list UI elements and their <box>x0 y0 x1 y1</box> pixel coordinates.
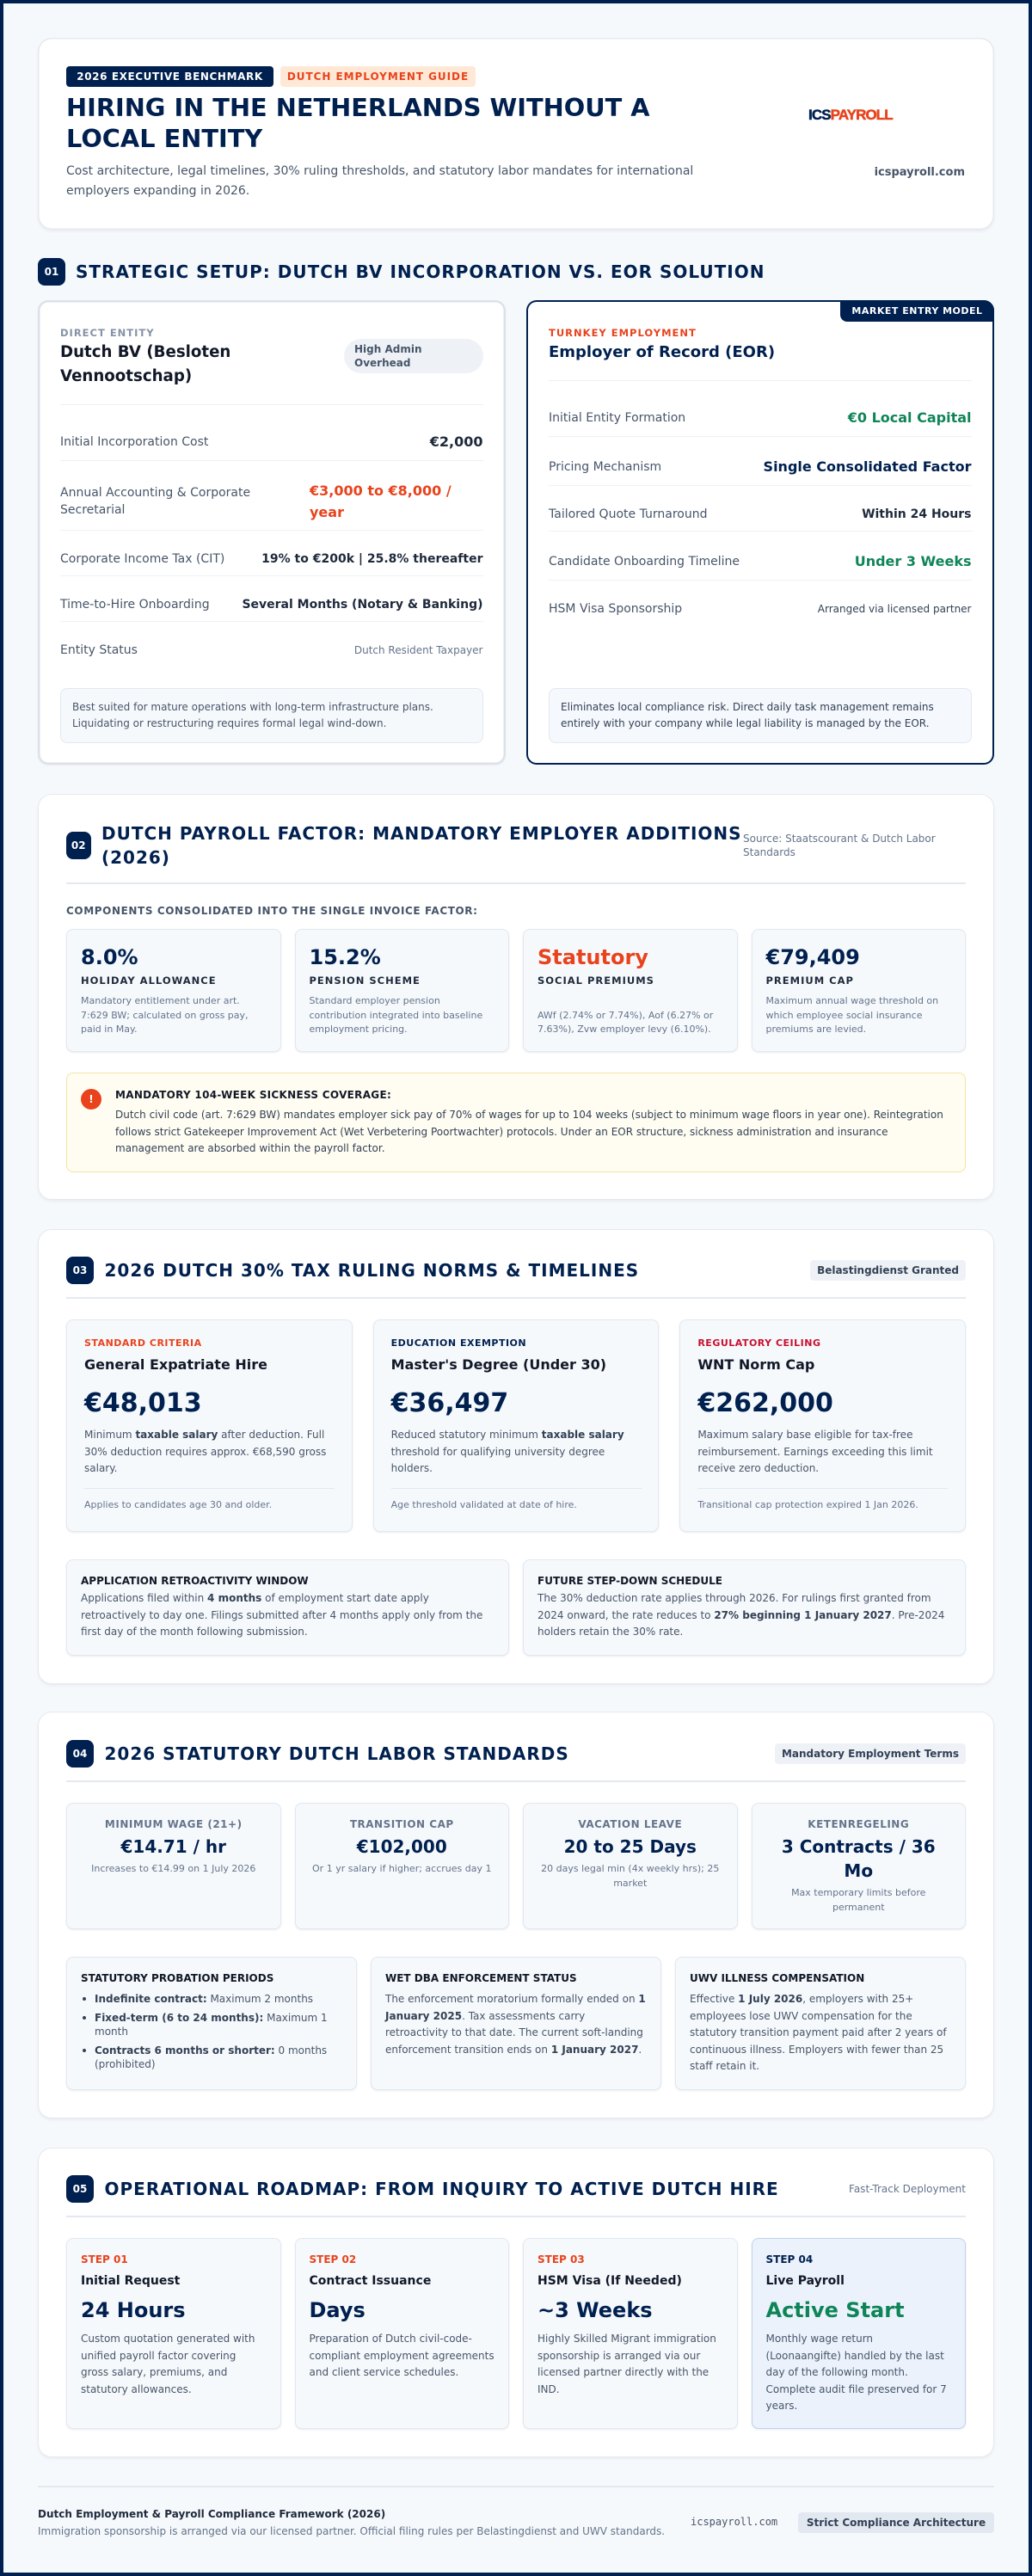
list: probation: month <box>95 2026 128 2038</box>
tag: Mandatory Employment Terms <box>782 1748 959 1760</box>
stat: minimum wage: MINIMUM WAGE (21+) <box>105 1818 243 1830</box>
card: WNT norm cap: Transitional cap protection expired 1 Jan 2026. <box>697 1499 918 1510</box>
row: CIT: Corporate Income Tax (CIT) <box>60 552 224 566</box>
row: CIT <box>60 543 483 576</box>
row: pricing: Pricing Mechanism <box>549 459 661 473</box>
card: general expatriate: General Expatriate Hire <box>84 1356 267 1373</box>
step 4 <box>752 2238 966 2429</box>
card: UWV illness: Effective 1 July 2026, employers with 25+ <box>690 1993 913 2005</box>
stat: minimum wage: Increases to €14.99 on 1 July 2026 <box>91 1863 255 1873</box>
number badge 01 <box>38 258 65 286</box>
callout body: management are absorbed within the payroll factor. <box>115 1142 385 1154</box>
panel: section 3 tax ruling <box>38 1229 994 1684</box>
card: general expatriate <box>66 1319 353 1532</box>
card: UWV illness: statutory transition payment paid after 2 years of <box>690 2026 947 2038</box>
badge: 2026 executive benchmark <box>66 66 273 87</box>
icon: warning <box>81 1089 101 1110</box>
step 4: STEP 04 <box>765 2253 813 2266</box>
number badge 02 <box>66 832 91 859</box>
section title: (2026) <box>101 847 170 868</box>
card: premium cap: PREMIUM CAP <box>765 974 854 987</box>
card: pension scheme: Standard employer pension <box>310 995 440 1006</box>
side note: Fast-Track Deployment <box>849 2183 966 2195</box>
step 1: gross salary, premiums, and <box>81 2366 227 2378</box>
row: accounting: Annual Accounting & Corporate <box>60 485 250 499</box>
card: holiday allowance: paid in May. <box>81 1024 137 1035</box>
card: general expatriate: 30% deduction requires approx. €68,590 gross <box>84 1445 326 1457</box>
card: step-down schedule <box>523 1559 966 1656</box>
step 2: Preparation of Dutch civil-code- <box>310 2333 472 2345</box>
number badge 04 <box>66 1740 94 1768</box>
stat: vacation leave: 20 days legal min (4x weekly hrs); 25 <box>541 1863 719 1873</box>
card: holiday allowance: HOLIDAY ALLOWANCE <box>81 974 217 987</box>
step 1: unified payroll factor covering <box>81 2350 236 2362</box>
source note: Standards <box>743 846 796 858</box>
card: Wet DBA: WET DBA ENFORCEMENT STATUS <box>385 1972 577 1984</box>
section title: STRATEGIC SETUP: DUTCH BV INCORPORATION VS. EOR SOLUTION <box>76 261 765 282</box>
row: incorporation cost <box>60 423 483 461</box>
step 2 <box>294 2238 509 2429</box>
panel: section 5 roadmap <box>38 2148 994 2457</box>
stat: vacation leave: 20 to 25 Days <box>564 1836 697 1857</box>
row: formation: Initial Entity Formation <box>549 411 685 425</box>
badge: Dutch employment guide: DUTCH EMPLOYMENT GUIDE <box>287 71 469 83</box>
card: probation periods: STATUTORY PROBATION PERIODS <box>81 1972 273 1984</box>
row: visa: Arranged via licensed partner <box>818 603 972 615</box>
card: UWV illness <box>675 1957 966 2090</box>
card: general expatriate: salary. <box>84 1462 117 1474</box>
eyebrow: DIRECT ENTITY <box>60 327 155 339</box>
number badge 01: 01 <box>45 266 58 278</box>
ribbon: MARKET ENTRY MODEL <box>851 305 983 317</box>
pill: high admin overhead: High Admin <box>354 343 422 355</box>
subtitle: employers expanding in 2026. <box>66 184 249 198</box>
stat: transition cap: €102,000 <box>357 1836 447 1857</box>
note: Best suited for mature operations with long-term infrastructure plans. <box>72 700 433 712</box>
row: CIT: 19% to €200k | 25.8% thereafter <box>261 552 483 566</box>
stat: ketenregeling: 3 Contracts / 36 <box>782 1836 936 1857</box>
panel: Dutch BV <box>38 300 506 765</box>
step 3: licensed partner directly with the <box>538 2366 709 2378</box>
name: Dutch BV (Besloten <box>60 343 230 361</box>
number badge 04: 04 <box>73 1748 87 1760</box>
card: general expatriate: €48,013 <box>84 1388 202 1418</box>
number badge 02: 02 <box>71 839 86 851</box>
title: LOCAL ENTITY <box>66 124 262 153</box>
section title: 2026 DUTCH 30% TAX RULING NORMS & TIMELINES <box>105 1260 639 1281</box>
row: onboarding <box>549 543 972 581</box>
source note <box>743 833 936 858</box>
panel: Employer of Record <box>526 300 994 765</box>
step 3: IND. <box>538 2382 560 2395</box>
step 4: Active Start <box>765 2298 905 2322</box>
source note: Source: Staatscourant & Dutch Labor <box>743 833 936 845</box>
stat: ketenregeling: Mo <box>844 1860 873 1881</box>
callout title: MANDATORY 104-WEEK SICKNESS COVERAGE: <box>115 1089 391 1101</box>
card: WNT norm cap: receive zero deduction. <box>697 1462 819 1474</box>
tag <box>775 1743 966 1764</box>
callout body <box>115 1109 943 1154</box>
card: WNT norm cap: REGULATORY CEILING <box>697 1337 820 1349</box>
row: time to hire: Time-to-Hire Onboarding <box>60 597 210 611</box>
card: Wet DBA <box>371 1957 661 2090</box>
list: probation: Contracts 6 months or shorter: 0 months <box>95 2044 327 2056</box>
card: premium cap: which employee social insurance <box>765 1010 922 1020</box>
step 1 <box>66 2238 280 2429</box>
step 1: Custom quotation generated with <box>81 2333 255 2345</box>
stat: vacation leave: market <box>613 1877 647 1889</box>
card: masters degree: Reduced statutory minimum taxable salary <box>391 1429 624 1441</box>
badge: 2026 executive benchmark: 2026 EXECUTIVE BENCHMARK <box>77 71 263 83</box>
step 4: years. <box>765 2400 797 2412</box>
footer title: Dutch Employment & Payroll Compliance Framework (2026) <box>38 2508 385 2520</box>
card: masters degree: Master's Degree (Under 30) <box>391 1356 606 1373</box>
list: probation: Fixed-term (6 to 24 months): Maximum 1 <box>95 2012 328 2024</box>
step 2: Days <box>310 2298 366 2322</box>
section title <box>101 823 742 868</box>
stat: ketenregeling: KETENREGELING <box>808 1818 909 1830</box>
row: quote <box>549 497 972 532</box>
step 3: HSM Visa (If Needed) <box>538 2274 682 2288</box>
card: holiday allowance: 7:629 BW; calculated on gross pay, <box>81 1010 249 1020</box>
tag: Belastingdienst Granted <box>817 1264 959 1276</box>
stat: transition cap <box>294 1803 509 1929</box>
row: onboarding: Under 3 Weeks <box>855 553 972 569</box>
row: time to hire <box>60 587 483 622</box>
pill: high admin overhead: Overhead <box>354 357 410 369</box>
tag <box>810 1260 966 1281</box>
row: entity status <box>60 643 483 657</box>
stat: ketenregeling: Max temporary limits before <box>791 1887 925 1897</box>
card: WNT norm cap: WNT Norm Cap <box>697 1356 814 1373</box>
card: UWV illness: staff retain it. <box>690 2060 759 2072</box>
footer url: icspayroll.com <box>691 2516 777 2528</box>
card: UWV illness: employees lose UWV compensation for the <box>690 2009 912 2021</box>
card: masters degree: €36,497 <box>391 1388 508 1418</box>
stat: ketenregeling <box>752 1803 966 1929</box>
callout body: Dutch civil code (art. 7:629 BW) mandates employer sick pay of 70% of wages for up to 104 weeks (subject to minimum wage floors in year one). Reintegration <box>115 1109 943 1121</box>
title: HIRING IN THE NETHERLANDS WITHOUT A <box>66 93 650 122</box>
row: quote: Within 24 Hours <box>862 507 972 521</box>
row: accounting: year <box>310 504 344 520</box>
card: masters degree: threshold for qualifying university degree <box>391 1445 605 1457</box>
card: pension scheme: 15.2% <box>310 944 381 968</box>
card: pension scheme: employment pricing. <box>310 1024 408 1035</box>
note: Liquidating or restructuring requires formal legal wind-down. <box>72 717 386 729</box>
card: UWV illness: continuous illness. Employers with fewer than 25 <box>690 2044 943 2056</box>
name <box>60 343 230 385</box>
card: general expatriate: STANDARD CRITERIA <box>84 1337 202 1349</box>
list: probation: Indefinite contract: Maximum 2 months <box>95 1993 313 2005</box>
logo: ICSPAYROLL <box>808 107 893 123</box>
step 4: (Loonaangifte) handled by the last <box>765 2350 944 2362</box>
step 1: 24 Hours <box>81 2298 186 2322</box>
note: entirely with your company while legal liability is managed by the EOR. <box>561 717 930 729</box>
note <box>60 688 483 743</box>
card: retroactivity window: first day of the month following submission. <box>81 1626 308 1638</box>
number badge 03: 03 <box>73 1264 87 1276</box>
name: Vennootschap) <box>60 367 192 385</box>
note: Eliminates local compliance risk. Direct daily task management remains <box>561 700 934 712</box>
card: masters degree <box>373 1319 659 1532</box>
footer tag: Strict Compliance Architecture <box>807 2517 986 2529</box>
card: Wet DBA: retroactivity to that date. The current soft-landing <box>385 2026 643 2038</box>
step 2: compliant employment agreements <box>310 2350 494 2362</box>
card: premium cap <box>752 929 966 1052</box>
section 1 heading <box>38 258 765 286</box>
row: formation <box>549 399 972 437</box>
row: incorporation cost: Initial Incorporation Cost <box>60 435 208 449</box>
step 3 <box>523 2238 738 2429</box>
row: visa: HSM Visa Sponsorship <box>549 602 682 616</box>
pill: high admin overhead <box>344 339 483 373</box>
panel: section 2 payroll factor <box>38 794 994 1200</box>
card: retroactivity window: APPLICATION RETROACTIVITY WINDOW <box>81 1575 309 1587</box>
step 2: STEP 02 <box>310 2253 356 2266</box>
step 4: Live Payroll <box>765 2274 845 2288</box>
card: holiday allowance <box>66 929 280 1052</box>
row: entity status: Dutch Resident Taxpayer <box>354 644 483 656</box>
card: general expatriate: Minimum taxable salary after deduction. Full <box>84 1429 324 1441</box>
row: accounting <box>60 472 483 531</box>
row: pricing <box>549 448 972 486</box>
card: WNT norm cap: Maximum salary base eligible for tax-free <box>697 1429 912 1441</box>
row: incorporation cost: €2,000 <box>430 433 483 450</box>
card: general expatriate: Applies to candidates age 30 and older. <box>84 1499 272 1510</box>
website: icspayroll.com <box>875 166 965 179</box>
row: entity status: Entity Status <box>60 643 138 657</box>
step 3: ~3 Weeks <box>538 2298 653 2322</box>
card: premium cap: Maximum annual wage threshold on <box>765 995 938 1006</box>
card: premium cap: premiums are levied. <box>765 1024 866 1035</box>
card: step-down schedule: 2024 onward, the rate reduces to 27% beginning 1 January 2027. Pre-2024 <box>538 1608 944 1620</box>
card: holiday allowance: Mandatory entitlement under art. <box>81 995 240 1006</box>
footer tag <box>798 2512 994 2533</box>
card: masters degree: EDUCATION EXEMPTION <box>391 1337 526 1349</box>
card: pension scheme: contribution integrated into baseline <box>310 1010 482 1020</box>
subtitle <box>66 163 693 198</box>
section title: DUTCH PAYROLL FACTOR: MANDATORY EMPLOYER ADDITIONS <box>101 823 742 844</box>
stat: ketenregeling: permanent <box>832 1901 885 1913</box>
icon: warning: ! <box>89 1093 94 1105</box>
card: social premiums <box>523 929 738 1052</box>
row: quote: Tailored Quote Turnaround <box>549 507 707 521</box>
list: probation: (prohibited) <box>95 2058 156 2070</box>
row: accounting: €3,000 to €8,000 / <box>310 483 452 499</box>
step 4: Monthly wage return <box>765 2333 873 2345</box>
list: probation <box>83 1993 328 2070</box>
badge: Dutch employment guide <box>280 66 476 87</box>
step 2: and client service schedules. <box>310 2366 458 2378</box>
card: step-down schedule: The 30% deduction rate applies through 2026. For rulings first granted from <box>538 1592 931 1604</box>
subheading: COMPONENTS CONSOLIDATED INTO THE SINGLE INVOICE FACTOR: <box>66 905 478 917</box>
number badge 03 <box>66 1257 94 1284</box>
step 4: day of the following month. <box>765 2366 908 2378</box>
card: pension scheme: PENSION SCHEME <box>310 974 421 987</box>
stat: minimum wage <box>66 1803 280 1929</box>
step 1: STEP 01 <box>81 2253 128 2266</box>
card: pension scheme <box>294 929 509 1052</box>
card: Wet DBA: enforcement transition ends on 1 January 2027. <box>385 2044 642 2056</box>
card: masters degree: holders. <box>391 1462 433 1474</box>
title <box>66 93 650 153</box>
card: retroactivity window <box>66 1559 509 1656</box>
step 3: Highly Skilled Migrant immigration <box>538 2333 716 2345</box>
section title: OPERATIONAL ROADMAP: FROM INQUIRY TO ACTIVE DUTCH HIRE <box>105 2179 779 2199</box>
row: onboarding: Candidate Onboarding Timeline <box>549 554 740 568</box>
step 3: sponsorship is arranged via our <box>538 2350 700 2362</box>
note <box>549 688 972 743</box>
panel: header <box>38 38 994 230</box>
card: WNT norm cap: €262,000 <box>697 1388 833 1418</box>
stat: transition cap: Or 1 yr salary if higher; accrues day 1 <box>312 1863 491 1873</box>
card: step-down schedule: FUTURE STEP-DOWN SCHEDULE <box>538 1575 722 1587</box>
card: retroactivity window: retroactively to day one. Filings submitted after 4 months apply only from the <box>81 1608 482 1620</box>
card: probation periods <box>66 1957 357 2090</box>
card: social premiums: 7.63%), Zvw employer levy (6.10%). <box>538 1024 711 1035</box>
step 1: statutory allowances. <box>81 2382 192 2395</box>
callout: sickness coverage <box>66 1073 966 1172</box>
stat: transition cap: TRANSITION CAP <box>350 1818 454 1830</box>
step 3: STEP 03 <box>538 2253 585 2266</box>
step 1: Initial Request <box>81 2274 180 2288</box>
card: social premiums: SOCIAL PREMIUMS <box>538 974 654 987</box>
stat: vacation leave: VACATION LEAVE <box>578 1818 682 1830</box>
eyebrow: TURNKEY EMPLOYMENT <box>549 327 697 339</box>
row: visa <box>549 602 972 616</box>
card: UWV illness: UWV ILLNESS COMPENSATION <box>690 1972 864 1984</box>
card: Wet DBA: The enforcement moratorium formally ended on 1 <box>385 1993 646 2005</box>
stat: vacation leave <box>523 1803 738 1929</box>
number badge 05: 05 <box>73 2183 87 2195</box>
step 2: Contract Issuance <box>310 2274 431 2288</box>
card: step-down schedule: holders retain the 30% rate. <box>538 1626 683 1638</box>
footer note: Immigration sponsorship is arranged via our licensed partner. Official filing rules per Belastingdienst and UWV standards. <box>38 2525 665 2537</box>
row: formation: €0 Local Capital <box>848 409 972 426</box>
number badge 05 <box>66 2175 94 2203</box>
card: WNT norm cap: reimbursement. Earnings exceeding this limit <box>697 1445 933 1457</box>
card: retroactivity window: Applications filed within 4 months of employment start date apply <box>81 1592 429 1604</box>
row: accounting: Secretarial <box>60 502 125 516</box>
name: Employer of Record (EOR) <box>549 343 775 361</box>
callout body: follows strict Gatekeeper Improvement Act (Wet Verbetering Poortwachter) protocols. Under an EOR structure, sickness administration and insurance <box>115 1125 888 1137</box>
subtitle: Cost architecture, legal timelines, 30% ruling thresholds, and statutory labor mandates for international <box>66 163 693 177</box>
ribbon <box>840 300 994 322</box>
step 4: Complete audit file preserved for 7 <box>765 2382 947 2395</box>
card: masters degree: Age threshold validated at date of hire. <box>391 1499 577 1510</box>
section title: 2026 STATUTORY DUTCH LABOR STANDARDS <box>105 1743 569 1764</box>
row: time to hire: Several Months (Notary & Banking) <box>242 597 483 611</box>
card: WNT norm cap <box>679 1319 966 1532</box>
card: holiday allowance: 8.0% <box>81 944 138 968</box>
card: social premiums: AWf (2.74% or 7.74%), Aof (6.27% or <box>538 1010 713 1020</box>
row: pricing: Single Consolidated Factor <box>764 458 972 475</box>
stat: minimum wage: €14.71 / hr <box>120 1836 226 1857</box>
card: Wet DBA: January 2025. Tax assessments carry <box>385 2009 585 2021</box>
card: social premiums: Statutory <box>538 944 648 968</box>
panel: section 4 labor standards <box>38 1712 994 2118</box>
footer <box>38 2486 994 2539</box>
card: premium cap: €79,409 <box>765 944 860 968</box>
